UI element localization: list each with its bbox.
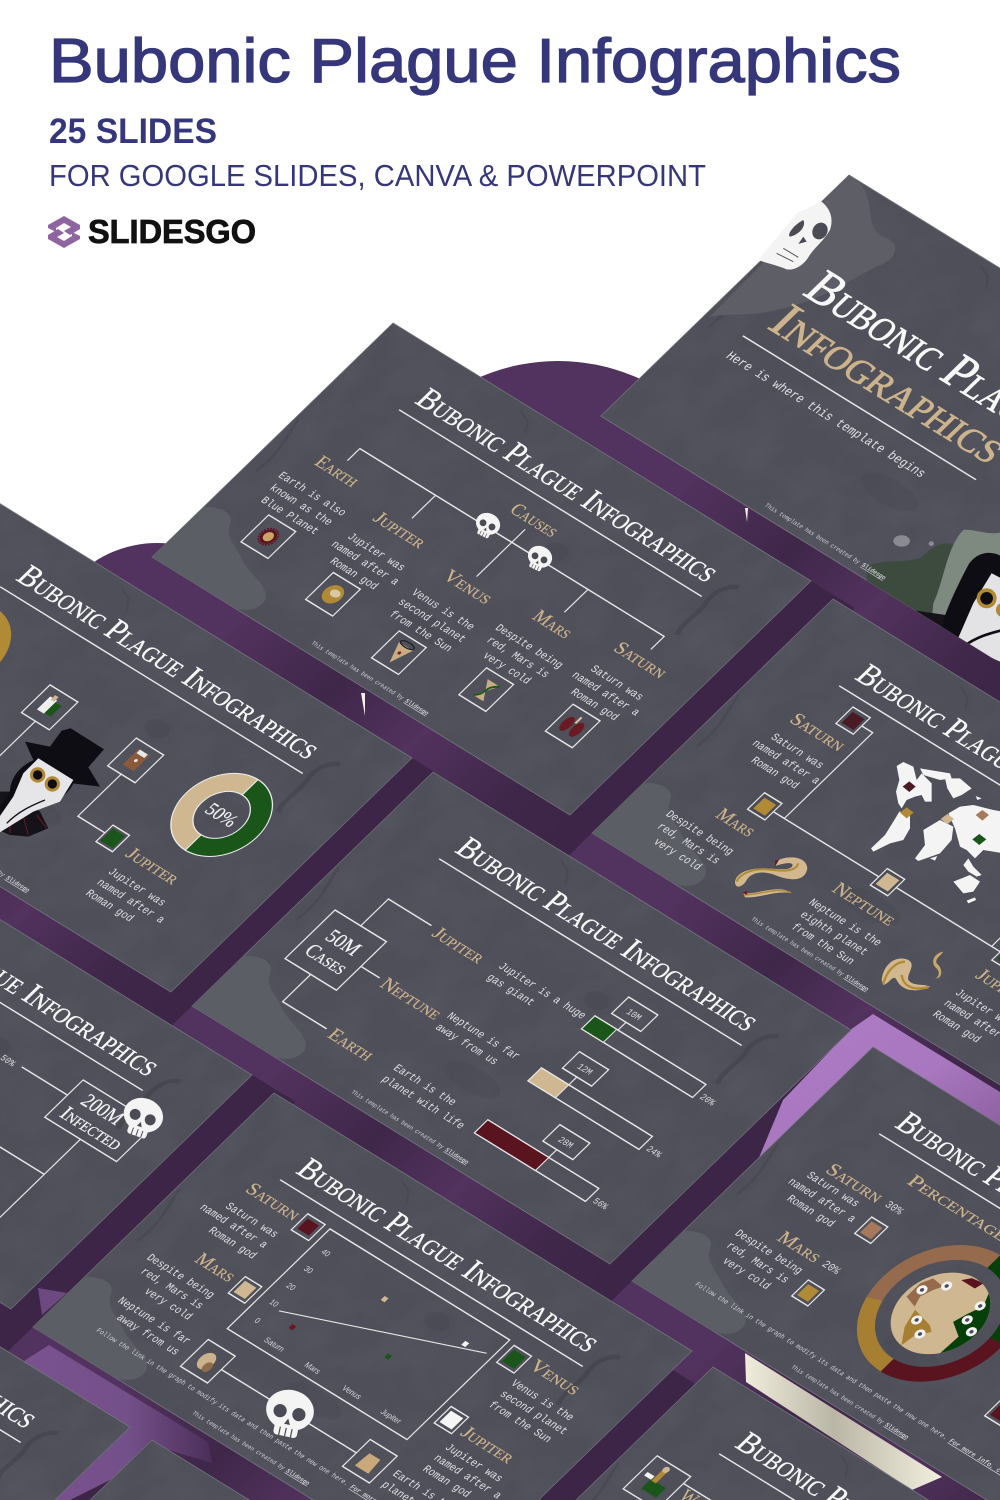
subtitle: slide count: 25 SLIDES xyxy=(49,112,217,151)
legend earth xyxy=(378,1469,478,1500)
slide: bottom blank fragment xyxy=(0,1440,570,1500)
column mars: red, Mars is xyxy=(483,635,552,681)
legend saturn: Roman god xyxy=(747,755,801,792)
legend saturn xyxy=(185,1169,327,1276)
row jupiter: Jupiter is a huge xyxy=(495,961,588,1022)
column saturn: Saturn xyxy=(609,638,673,682)
row earth xyxy=(317,1002,641,1218)
icon: chart skull xyxy=(261,1385,318,1441)
legend mars: very cold xyxy=(719,1256,773,1293)
row neptune: 12M xyxy=(574,1061,595,1078)
row neptune: Neptune is far xyxy=(443,1011,522,1063)
legend venus: Venus xyxy=(525,1355,586,1399)
legend mars: Despite being xyxy=(143,1252,217,1301)
legend jupiter xyxy=(55,825,204,937)
chart axis labels xyxy=(241,1247,481,1426)
legend saturn: named after a xyxy=(748,738,823,787)
row neptune: Neptune xyxy=(376,974,447,1023)
slide: bottom right fragment xyxy=(472,1367,1000,1500)
column venus: second planet xyxy=(394,597,468,646)
row earth: 56% xyxy=(590,1196,611,1212)
legend neptune: Neptune xyxy=(828,878,901,929)
causes footer: This template has been created by Slidesgo xyxy=(309,640,431,717)
legend saturn xyxy=(737,683,879,798)
chart axis labels: 20 xyxy=(284,1281,298,1293)
donut chart xyxy=(150,758,294,872)
world map xyxy=(871,762,1000,903)
legend saturn xyxy=(773,1150,911,1252)
legend red swatch xyxy=(985,1399,1000,1426)
legend venus: second planet xyxy=(496,1389,570,1438)
chart axis labels: Jupiter xyxy=(378,1407,404,1426)
column jupiter: named after a xyxy=(327,539,402,588)
column jupiter: Roman god xyxy=(326,556,380,593)
row jupiter: gas giant xyxy=(483,972,537,1009)
chart axis labels: Mars xyxy=(302,1361,323,1376)
slide: world map xyxy=(592,599,1000,1091)
chart line and points xyxy=(272,1258,487,1413)
row earth: Earth is the xyxy=(390,1063,459,1109)
row earth: 28M xyxy=(555,1135,576,1151)
icon box brown book xyxy=(108,738,164,783)
map footer: This template has been created by Slidesgo xyxy=(749,916,871,993)
column mars: very cold xyxy=(479,651,533,687)
legend mars xyxy=(121,1230,264,1338)
column mars: Despite being xyxy=(491,623,565,672)
legend saturn: Saturn was xyxy=(803,1170,862,1210)
slide: percentage ring xyxy=(632,1047,1000,1500)
legend jupiter: Jupiter xyxy=(121,843,185,888)
bars title: Bubonic Plague Infographics xyxy=(448,831,767,1037)
cover subtitle: Here is where this template begins xyxy=(722,349,929,481)
legend jupiter: Jupiter was xyxy=(441,1442,505,1485)
legend neptune: Neptune is the xyxy=(805,897,884,949)
legend jupiter xyxy=(397,1406,538,1500)
icon: infected skull xyxy=(117,1092,168,1143)
column saturn xyxy=(527,632,681,760)
legend mars xyxy=(709,1209,850,1315)
bars footer: This template has been created by Slidesgo xyxy=(349,1089,471,1166)
legend venus: Venus is the xyxy=(507,1378,576,1424)
donut chart: 50% xyxy=(200,799,242,832)
infected box: Infected xyxy=(54,1103,128,1154)
legend jupiter: Roman god xyxy=(929,1009,983,1046)
row jupiter xyxy=(422,898,748,1116)
donut title: Bubonic Plague Infographics xyxy=(9,559,328,765)
legend saturn: Saturn xyxy=(241,1179,306,1224)
gold circle xyxy=(0,586,33,704)
slide: cover background xyxy=(601,175,1000,682)
column venus xyxy=(353,559,507,686)
purple background blobs xyxy=(0,361,1000,1500)
ring footer: This template has been created by Slidesgo xyxy=(789,1364,911,1441)
legend jupiter xyxy=(929,942,1000,1058)
column jupiter: Jupiter was xyxy=(344,531,408,574)
infected connectors xyxy=(0,1067,103,1222)
cases box: 50M xyxy=(320,926,366,960)
legend mars: Mars xyxy=(711,804,761,840)
heading causes: Causes xyxy=(506,499,564,541)
column earth: Blue Planet xyxy=(257,495,321,538)
legend mars: very cold xyxy=(650,837,704,873)
row jupiter: Jupiter xyxy=(428,923,490,967)
icon: slidesgo mark xyxy=(48,216,80,248)
legend neptune: from the Sun xyxy=(788,922,857,968)
column mars xyxy=(439,596,593,722)
column earth xyxy=(222,443,377,570)
column venus: from the Sun xyxy=(386,609,455,655)
cases box xyxy=(285,910,386,990)
connector lines xyxy=(773,724,1000,952)
row earth: Earth xyxy=(323,1024,379,1064)
cover footer: This template has been created by Slidesgo xyxy=(763,502,888,581)
legend saturn: Roman god xyxy=(783,1194,837,1230)
cream shape between slides xyxy=(745,1353,942,1490)
legend venus xyxy=(463,1341,605,1449)
infected box: 200M xyxy=(75,1090,129,1130)
subtitle: platforms: FOR GOOGLE SLIDES, CANVA & POWERPOINT xyxy=(49,158,706,193)
slide: 200M infected xyxy=(0,817,252,1309)
column mars: Mars xyxy=(528,606,578,642)
slide: causes tree xyxy=(152,323,811,815)
legend mars: very cold xyxy=(140,1286,195,1323)
column jupiter: Jupiter xyxy=(369,508,432,552)
cover decorations: blob, skull, plague doctor xyxy=(710,175,1000,670)
cover title: Infographics xyxy=(757,294,1000,473)
connector xyxy=(683,1483,733,1500)
icon: causes skull left xyxy=(471,509,504,541)
legend mars: Despite being xyxy=(731,1228,805,1277)
cases connectors xyxy=(283,899,433,1029)
tree connectors xyxy=(325,436,678,671)
legend neptune: Neptune is far xyxy=(114,1296,193,1348)
row jupiter: 10M xyxy=(623,1007,644,1023)
small white spikes xyxy=(361,508,748,716)
connector lines xyxy=(0,721,148,833)
slide: bars and cases xyxy=(192,772,851,1264)
chart axis labels: Saturn xyxy=(262,1336,287,1353)
icon: worm left xyxy=(735,857,807,897)
legend saturn: named after a xyxy=(196,1202,270,1252)
legend mars: red, Mars is xyxy=(653,821,722,867)
medium purple shapes lower left xyxy=(0,1288,212,1500)
legend jupiter: Roman god xyxy=(419,1464,473,1500)
chart title: Bubonic Plague Infographics xyxy=(289,1152,608,1358)
icon box jar xyxy=(342,1439,397,1483)
column earth: Earth xyxy=(310,452,364,491)
logo xyxy=(48,213,256,250)
globe xyxy=(890,1272,990,1354)
icon: plague doctor xyxy=(0,728,104,837)
chart footer: This template has been created by Slidesgo xyxy=(190,1410,312,1487)
icon: cover skull xyxy=(758,202,832,270)
row neptune: 24% xyxy=(643,1144,665,1160)
slide: bottom left title fragment xyxy=(0,1169,130,1500)
column earth: known as the xyxy=(266,483,335,529)
legend jupiter: Jupiter xyxy=(456,1422,520,1467)
row jupiter: 20% xyxy=(697,1092,718,1108)
chart axis labels: 0 xyxy=(252,1316,263,1325)
legend mars: Mars xyxy=(773,1227,827,1266)
chart axis labels: 10 xyxy=(267,1298,281,1309)
legend mars: 20% xyxy=(818,1259,843,1278)
icon: worm right xyxy=(882,952,943,990)
legend saturn: Saturn was xyxy=(767,732,826,772)
legend jupiter: named after a xyxy=(93,877,167,927)
column saturn: Roman god xyxy=(567,687,621,724)
column saturn: named after a xyxy=(568,670,642,719)
legend jupiter: Roman god xyxy=(82,888,136,925)
chart axis labels: 30 xyxy=(301,1264,316,1276)
legend saturn: Saturn xyxy=(821,1159,889,1207)
legend mars xyxy=(640,764,783,880)
legend mars: Despite being xyxy=(662,809,736,858)
slide: cover content xyxy=(642,255,1000,592)
column venus: Venus is the xyxy=(408,587,477,633)
legend saturn: 30% xyxy=(881,1199,906,1218)
light purple shape behind percentage slide xyxy=(758,1014,1000,1160)
icon: causes skull right xyxy=(523,542,556,574)
legend mars: red, Mars is xyxy=(137,1266,206,1312)
row neptune: away from us xyxy=(432,1022,501,1068)
legend saturn: named after a xyxy=(784,1177,858,1226)
legend jupiter: Jupiter was xyxy=(104,867,168,909)
icon box sleeper xyxy=(623,1456,691,1500)
column saturn: Saturn was xyxy=(587,664,646,704)
infected box xyxy=(45,1080,155,1162)
ring chart xyxy=(835,1229,1000,1397)
chart axis labels: Venus xyxy=(340,1384,364,1401)
column earth: Earth is also xyxy=(274,470,348,519)
legend saturn: Saturn xyxy=(785,709,851,755)
legend neptune: away from us xyxy=(113,1313,182,1358)
legend neptune xyxy=(783,852,930,971)
slide: donut chart xyxy=(0,500,412,992)
legend saturn: Roman god xyxy=(205,1225,259,1262)
connector line xyxy=(221,1370,356,1453)
row earth: planet with life xyxy=(378,1074,467,1132)
row neptune xyxy=(371,950,695,1166)
legend mars: red, Mars is xyxy=(722,1241,791,1286)
legend neptune: eighth planet xyxy=(796,910,870,959)
legend saturn: Saturn was xyxy=(222,1201,281,1241)
icon box green and white xyxy=(21,685,78,730)
chart frame xyxy=(227,1229,510,1440)
chart axis labels: 40 xyxy=(319,1247,333,1259)
causes title: Bubonic Plague Infographics xyxy=(408,382,727,588)
title: Bubonic Plague Infographics xyxy=(49,27,901,96)
slide: line chart xyxy=(33,1093,692,1500)
logo wordmark: SLIDESGO xyxy=(88,213,256,250)
legend neptune xyxy=(101,1290,235,1383)
legend venus: from the Sun xyxy=(485,1400,554,1446)
cases box: Cases xyxy=(299,940,353,979)
legend mars: Mars xyxy=(190,1249,241,1286)
column jupiter xyxy=(287,502,440,628)
column venus: Venus xyxy=(439,566,498,608)
